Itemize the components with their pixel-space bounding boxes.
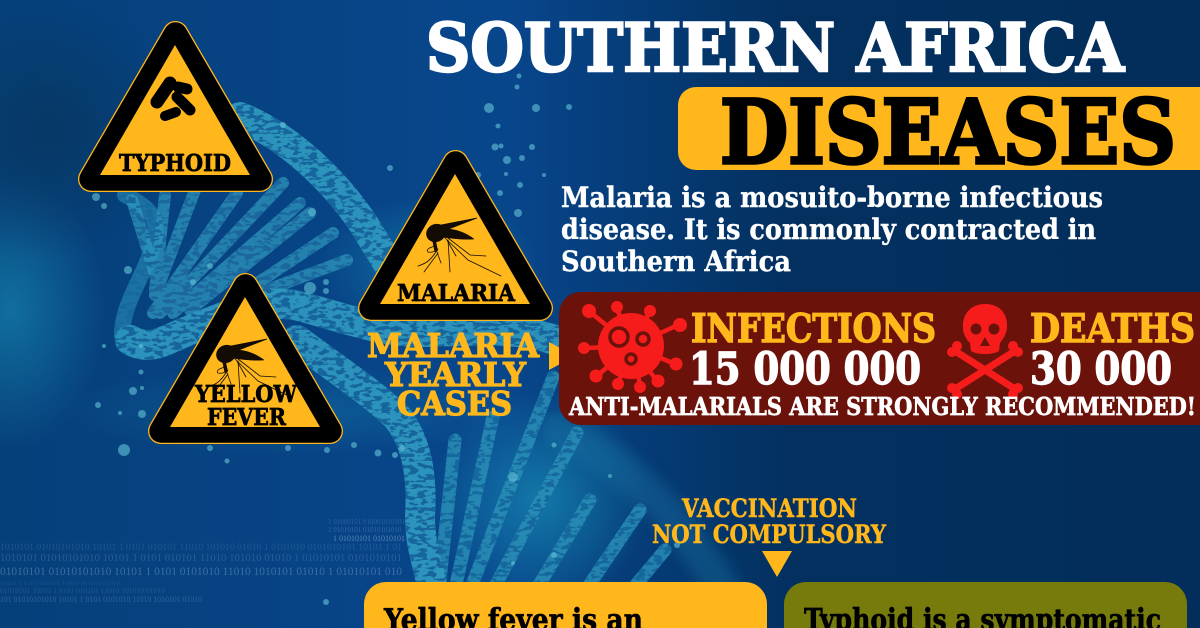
binary code pattern: 1 01010101 01010101010	[328, 526, 402, 534]
card: typhoid	[784, 582, 1187, 628]
number: infections: 15 000 000	[689, 344, 921, 395]
malaria yearly cases label: YEARLY	[384, 355, 526, 394]
vaccination note: VACCINATION	[681, 494, 857, 523]
binary code pattern: 1010101 01010101010 10101 1 0101 010101 11010 101010 01010 1 01010101 0101010101	[0, 553, 402, 564]
panel: malaria statistics	[559, 292, 1200, 425]
bokeh particles	[92, 74, 680, 605]
binary code pattern: 1 01010101 01010101	[333, 534, 405, 543]
sign label: yellow fever: FEVER	[207, 404, 287, 431]
icon: bacteria	[157, 83, 190, 116]
icon: virus	[578, 301, 687, 393]
malaria yearly cases label: MALARIA	[367, 326, 539, 365]
arrow down to cards	[762, 551, 792, 577]
card: yellow fever	[364, 582, 767, 628]
binary code pattern: 1 01000101 010001010101	[328, 518, 406, 526]
vaccination note: NOT COMPULSORY	[652, 520, 887, 549]
binary code pattern: 1010101 01010101010 10101 1 0101 010101 11010 101010 01010 1 0101010 0101010101 10101 1 01	[0, 543, 402, 553]
vaccination note	[652, 494, 887, 549]
intro text: Malaria is a mosuito-borne infectious	[561, 181, 1103, 214]
binary code pattern: 01010101 10101 1 0101 010101 11010 101010 01010	[0, 587, 166, 595]
binary code pattern: 01010101 01010101010 10101 1 0101 0101010 11010 1010101 01010 1 01010101 010	[0, 566, 402, 578]
rungs upper	[132, 183, 347, 313]
warning sign: yellow fever	[161, 286, 330, 431]
DNA helix	[122, 117, 735, 628]
icon: mosquito	[208, 339, 291, 397]
warning sign: typhoid	[91, 34, 260, 179]
icon: mosquito	[418, 218, 501, 276]
sign label: typhoid: TYPHOID	[119, 150, 231, 177]
binary code pattern	[0, 518, 406, 604]
binary code pattern: 101 01010101010 10101 1 0101 0101010 11010 1010101 01010	[0, 595, 202, 604]
faded right strand	[560, 430, 735, 610]
intro text: Southern Africa	[561, 245, 791, 278]
sign label: yellow fever: YELLOW	[194, 381, 298, 408]
intro text: disease. It is commonly contracted in	[561, 213, 1096, 246]
main strands	[122, 117, 555, 590]
binary code pattern: 10101 1 0101 010101 11010 101010 01010	[0, 580, 120, 587]
arrow to stats panel	[549, 342, 575, 370]
sign label: malaria: MALARIA	[397, 280, 516, 307]
heading: infections: INFECTIONS	[691, 306, 936, 352]
malaria yearly cases label: CASES	[397, 384, 512, 423]
number: deaths: 30 000	[1030, 344, 1172, 395]
rungs lower	[440, 377, 665, 628]
malaria yearly cases label	[367, 326, 539, 423]
title: SOUTHERN AFRICA	[426, 9, 1125, 87]
warning sign: malaria	[371, 163, 540, 308]
icon: skull and crossbones	[947, 304, 1023, 399]
